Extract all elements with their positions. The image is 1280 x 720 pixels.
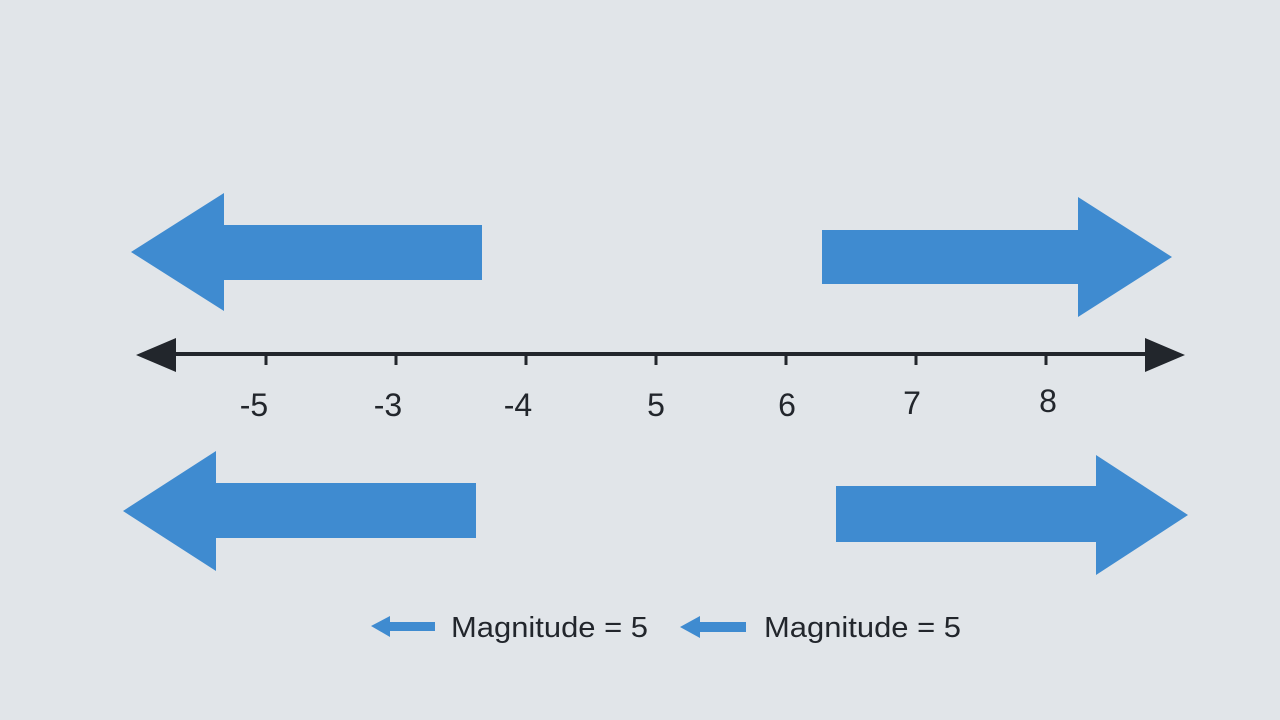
number line xyxy=(136,338,1185,372)
arrow: top-right xyxy=(822,197,1172,317)
tick labels: -4 xyxy=(504,387,532,423)
tick labels: 7 xyxy=(903,385,921,421)
arrow: bottom-left xyxy=(123,451,476,571)
arrow: bottom-right xyxy=(836,455,1188,575)
legend item 2: Magnitude = 5 xyxy=(764,612,961,644)
tick labels: 5 xyxy=(647,387,665,423)
legend item 1 xyxy=(371,612,648,644)
tick labels: -3 xyxy=(374,387,402,423)
legend item 1: Magnitude = 5 xyxy=(451,612,648,644)
arrow: top-left xyxy=(131,193,482,311)
legend item 2 xyxy=(680,612,961,644)
tick labels xyxy=(240,383,1057,423)
tick labels: 8 xyxy=(1039,383,1057,419)
tick labels: 6 xyxy=(778,387,796,423)
tick labels: -5 xyxy=(240,387,268,423)
